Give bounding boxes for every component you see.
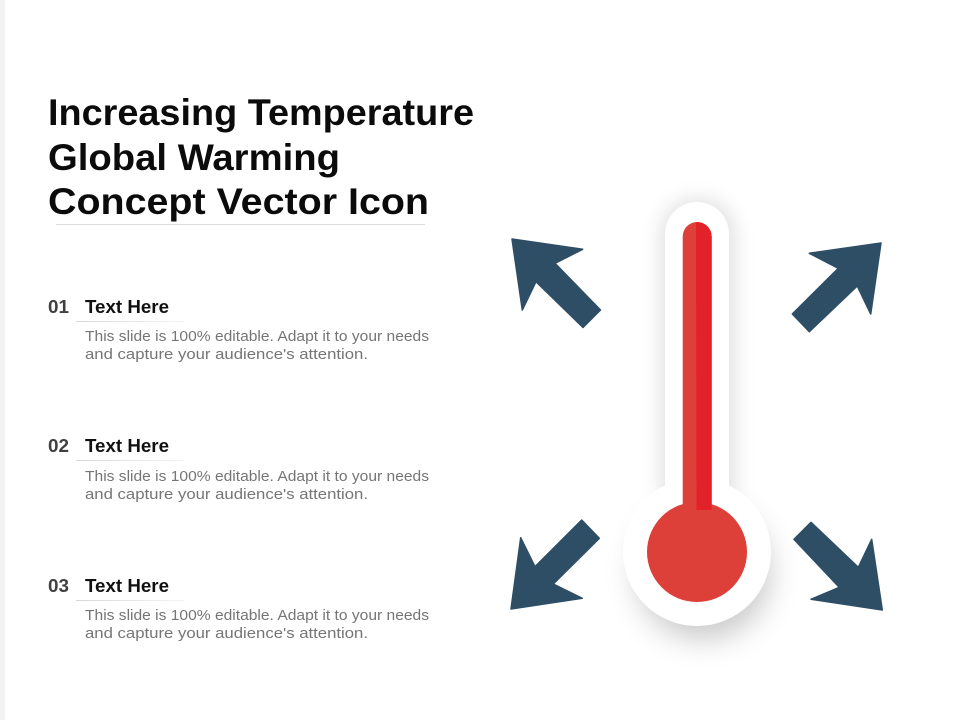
item 02: [48, 436, 429, 503]
item 02: Text Here: [85, 436, 169, 456]
title: Concept Vector Icon: [48, 181, 429, 222]
item 03: [48, 576, 429, 642]
thermometer: [623, 198, 771, 640]
title: [48, 92, 474, 222]
item 03: This slide is 100% editable. Adapt it to your needs: [85, 608, 429, 624]
item 01: [48, 297, 429, 363]
item 02: This slide is 100% editable. Adapt it to your needs: [85, 469, 429, 485]
thermometer white body: [623, 202, 771, 626]
item 02: 02: [48, 436, 69, 456]
item 03: and capture your audience's attention.: [85, 626, 368, 642]
arrow: up left: [512, 239, 600, 328]
arrow: down left: [511, 520, 599, 609]
item 01: 01: [48, 297, 69, 317]
bulb: [647, 502, 747, 602]
mercury column: [683, 222, 712, 510]
title: Increasing Temperature: [48, 92, 474, 133]
item 02: and capture your audience's attention.: [85, 487, 368, 503]
item 01: and capture your audience's attention.: [85, 347, 368, 363]
item 03: 03: [48, 576, 69, 596]
item 01: This slide is 100% editable. Adapt it to your needs: [85, 329, 429, 345]
title: Global Warming: [48, 137, 340, 178]
bulb shadow: [635, 504, 771, 640]
item 01: Text Here: [85, 297, 169, 317]
tube shadow: [660, 198, 736, 518]
arrow: down right: [794, 522, 882, 610]
arrow: up right: [792, 243, 881, 332]
item 03: Text Here: [85, 576, 169, 596]
